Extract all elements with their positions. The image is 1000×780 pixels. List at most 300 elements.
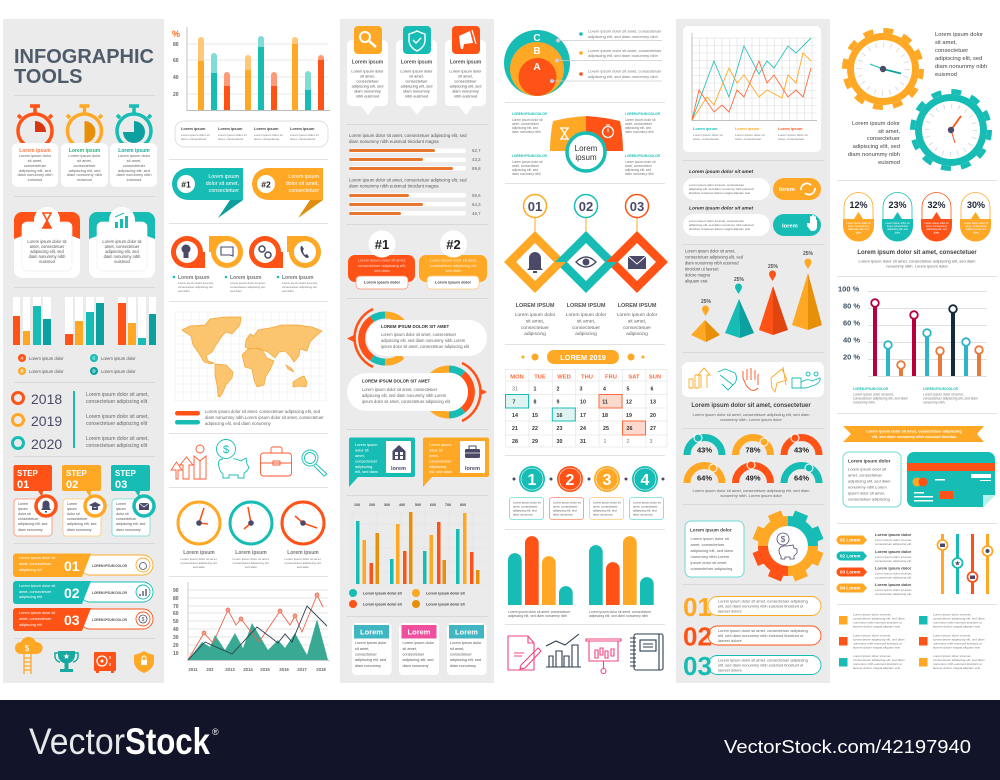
ribbon banner: [843, 426, 984, 442]
numbered circles: [510, 466, 664, 520]
gear text box: consectetuer adipiscing: [690, 566, 732, 571]
header cards: adipiscing elit, sed: [402, 658, 434, 662]
semi gauges: 64%: [697, 474, 712, 482]
tag list: 02 Lorem: [840, 554, 860, 558]
calendar: MON: [510, 374, 524, 380]
speech tag #1: consectetuer: [209, 188, 239, 194]
pin captions: Lorem ipsum dolor sit amet,: [282, 281, 318, 285]
header cards: consectetuer: [355, 652, 377, 656]
big numbered pills: 03: [683, 651, 712, 681]
stopwatch orange: [67, 106, 102, 148]
grouped bar chart: 800: [460, 503, 466, 507]
rounded bar charts: Lorem ipsum dolor sit amet, consectetuer: [508, 610, 571, 614]
center hub diagram: LOREM IPSUM DOLOR: [512, 112, 548, 116]
lollipop chart: nonummy nibh.: [923, 400, 946, 404]
square legend grid: Lorem ipsum dolor sit amet,: [853, 612, 891, 616]
rounded bar charts: Lorem ipsum dolor sit amet, consectetuer: [589, 610, 652, 614]
lollipop chart: 40 %: [843, 336, 860, 344]
mountain line chart: 20: [173, 643, 179, 649]
numbered diamonds: consectetuer: [572, 325, 600, 331]
center hub diagram: LOREM IPSUM DOLOR: [625, 154, 661, 158]
speech box: briefcase: elit, sed diam: [429, 469, 452, 474]
pyramid chart: 25%: [803, 251, 814, 257]
step 02: 02: [66, 479, 78, 491]
step 03: [111, 465, 154, 536]
numbered diamonds: Lorem ipsum dolor: [515, 312, 556, 318]
lollipop chart: 80 %: [843, 302, 860, 310]
row 02: amet, consectetuer: [19, 590, 52, 594]
year timeline: 2020: [31, 436, 62, 452]
clock captions: [180, 550, 322, 569]
card: growth chart: [89, 207, 155, 278]
credit card text box: [843, 452, 901, 507]
grouped bar chart: 300: [384, 503, 390, 507]
header cards: Lorem ipsum dolor: [355, 641, 387, 645]
step 02: Lorem: [67, 502, 77, 506]
nested circles ABC: adipiscing elit, sed diam nonummy nibh: [588, 74, 658, 79]
numbered circles: amet, consectetuer: [553, 504, 578, 508]
percent capsules: 12%: [849, 200, 868, 210]
calendar: 28: [512, 439, 518, 445]
center hub diagram: diam nonummy nibh: [512, 130, 541, 134]
grouped bar chart: 500: [415, 503, 421, 507]
header cards: consectetuer: [402, 652, 425, 656]
square legend grid: Lorem ipsum dolor sit amet,: [853, 654, 891, 658]
ring callout left: LOREM IPSUM DOLOR SIT AMET: [381, 324, 449, 329]
pyramid chart: 25%: [734, 277, 745, 283]
line chart card: amet, consectetuer: [735, 137, 761, 141]
numbered circles: amet, consectetuer: [593, 504, 618, 508]
speech box: house: amet,: [355, 453, 365, 458]
clock red: [282, 502, 324, 544]
clock captions: consectetuer adipiscing elit,: [285, 561, 322, 565]
gear clock teal: [912, 92, 990, 168]
percent capsules: diam: [895, 232, 900, 234]
tag list: consectetuer adipiscing elit,: [875, 576, 912, 580]
big numbered pills: Lorem ipsum dolor sit amet, consectetuer adipiscing: [718, 598, 808, 604]
stopwatch text: sit amet,: [77, 158, 92, 163]
progress bars: 64,3: [472, 202, 481, 207]
gear clock text: diam nonummy nibh: [848, 152, 900, 158]
big numbered pills: elit, sed diam nonummy nibh euismod tincidunt ut: [718, 633, 804, 638]
row 02: [13, 581, 153, 604]
speech box: briefcase: amet,: [429, 453, 439, 458]
numbered circles: diam nonummy: [553, 512, 573, 516]
footer band: Stock: [125, 721, 210, 762]
stopwatch teal: [117, 106, 151, 148]
line chart card: Lorem ipsum dolor sit: [778, 133, 808, 137]
callout text: consectetuer: [454, 78, 477, 84]
gear clock text: sit amet,: [878, 129, 900, 135]
grouped bar chart: 700: [445, 503, 451, 507]
semi gauges: nonummy nibh. Lorem ipsum dolor: [720, 493, 782, 498]
stopwatch text: adipiscing elit, sed: [69, 168, 100, 173]
callout text: Lorem ipsum: [352, 60, 384, 66]
gear clock text: consectetuer: [867, 136, 900, 142]
row 02: LOREM IPSUM DOLOR: [92, 591, 128, 595]
percent capsules: [843, 192, 991, 268]
clock captions: sed diam: [297, 565, 310, 569]
pyramid chart: aliquam erat: [685, 278, 708, 284]
calendar: 25: [603, 426, 609, 432]
square legend grid: nonummy nibh euismod tincidunt ut: [933, 621, 982, 625]
numbered diamonds: consectetuer: [521, 325, 549, 331]
tag #2 orange: #2: [446, 237, 461, 252]
callout: search: [347, 26, 388, 115]
ring callout left: [347, 309, 487, 367]
tag list: 03 Lorem: [840, 570, 860, 574]
stopwatches: [12, 106, 157, 187]
percent capsules: diam: [973, 232, 979, 234]
stopwatch text: consectetuer: [24, 163, 47, 168]
speech tag #2: #2: [261, 180, 271, 190]
callout text: nibh euismod: [405, 94, 428, 98]
progress bars: diam nonummy nibh euismod tincidunt magna: [349, 184, 439, 188]
chart caption box: Lorem ipsum dolor sit: [254, 133, 283, 137]
step 01: adipiscing elit, sed: [18, 522, 47, 526]
square legend grid: consectetuer adipiscing elit, sed diam: [933, 658, 985, 662]
row 03: LOREM IPSUM DOLOR: [92, 618, 128, 622]
lollipop chart: LOREM IPSUM DOLOR: [923, 387, 959, 391]
year timeline: consectetuer adipiscing elit: [86, 421, 148, 427]
center hub diagram: Lorem ipsum dolor sit: [512, 160, 543, 164]
step 02: STEP: [66, 469, 88, 478]
mountain line chart: 80: [173, 596, 179, 602]
line chart card: Lorem ipsum: [778, 126, 803, 131]
header cards: Lorem: [408, 628, 431, 636]
percent capsules: 30%: [967, 200, 985, 210]
tag list: Lorem ipsum dolor: [875, 582, 912, 587]
stopwatch text: euismod: [127, 177, 141, 182]
stopwatch cards: [12, 143, 157, 187]
percent capsules: adipiscing elit, sed: [887, 228, 908, 231]
map legend: adipiscing elit, sed diam nonummy: [205, 421, 272, 426]
rounded bar charts: adipiscing elit, sed diam nonummy nibh: [508, 614, 567, 618]
mountain line chart: 50: [173, 619, 179, 625]
percent bar chart: 80: [173, 42, 179, 48]
row 03: Lorem ipsum dolor sit: [19, 611, 56, 615]
gear clock text: adipiscing elit, sed: [935, 56, 982, 62]
stopwatch text: diam nonummy nibh: [67, 172, 102, 177]
calendar: 19: [626, 413, 632, 419]
header cards: sit amet,: [450, 647, 464, 651]
progress bars: diam nonummy nibh euismod tincidunt magna: [349, 139, 439, 144]
calendar: 1: [604, 439, 607, 445]
numbered diamonds: adipiscing: [626, 331, 648, 337]
ring callout right: LOREM IPSUM DOLOR SIT AMET: [362, 378, 430, 384]
speech tag #1: Lorem ipsum: [208, 174, 240, 180]
grouped bar chart: [347, 503, 486, 608]
tag #1 red: #1: [375, 237, 389, 252]
tag list: consectetuer adipiscing elit,: [875, 542, 912, 546]
square legend grid: consectetuer adipiscing elit, sed diam: [853, 638, 905, 642]
lollipop chart: LOREM IPSUM DOLOR: [853, 387, 889, 391]
speech box: house: consectetuer: [355, 458, 378, 464]
location pins: [171, 236, 321, 293]
stopwatch red: [18, 106, 52, 148]
gear clock text: consectetuer: [935, 48, 968, 54]
callout text: sit amet,: [360, 74, 375, 78]
gesture icons card: nonummy nibh. Lorem ipsum dolor: [720, 417, 782, 422]
stopwatch text: Lorem ipsum: [118, 148, 150, 154]
square legend grid: laoreet dolore magna aliquam erat: [933, 646, 980, 650]
tag list: Lorem ipsum dolor: [875, 566, 912, 570]
icon: notebook: [630, 634, 663, 670]
row 01: [13, 554, 153, 577]
button rows: Lorem ipsum dolor sit amet: [689, 206, 754, 212]
clock captions: consectetuer adipiscing elit,: [181, 561, 218, 565]
chart caption box: amet, consectetuer: [290, 137, 316, 141]
percent bar chart: 20: [173, 92, 179, 98]
icon: piggy bank: [216, 440, 249, 478]
calendar: 11: [602, 400, 608, 406]
numbered circles: adipiscing elit, sed: [553, 508, 577, 512]
numbered circles: Lorem ipsum dolor sit: [513, 500, 541, 504]
speech box: briefcase: lorem: [465, 466, 480, 472]
title: [14, 46, 154, 88]
nested circles ABC: Lorem ipsum dolor sit amet, consectetuer: [588, 28, 662, 34]
mountain line chart: 30: [173, 635, 179, 641]
numbered diamonds: LOREM IPSUM: [618, 303, 657, 309]
progress bars: 89,8: [472, 166, 481, 171]
big numbered pills: 01: [683, 592, 712, 622]
square legend grid: nonummy nibh euismod tincidunt ut: [933, 662, 982, 666]
step 02: ipsum: [67, 507, 77, 511]
speech box: house: lorem: [391, 466, 406, 472]
world map: [175, 312, 326, 401]
credit card text box: nonummy nibh.Lorem: [848, 484, 887, 490]
percent bar chart: [172, 27, 330, 110]
gear clocks: [844, 30, 990, 168]
chart caption box: Lorem ipsum dolor sit: [181, 133, 210, 137]
stopwatch text: Lorem ipsum dolor: [68, 153, 101, 158]
gear clock text: diam nonummy nibh: [935, 64, 987, 70]
speech tag #2: consectetuer: [289, 188, 319, 194]
map legend: [175, 409, 324, 426]
card: hourglass: [14, 207, 80, 278]
two badge cards: [14, 207, 155, 278]
credit card text box: amet, consectetuer: [848, 472, 883, 478]
gear text box: ipsum dolor sit amet,: [690, 560, 727, 565]
numbered diamonds: 03: [630, 199, 644, 214]
tag #2 orange: Lorem ipsum dolor sit amet,: [429, 258, 478, 262]
percent capsules: Lorem ipsum dolor sit amet, consectetuer adipiscing elit, sed diam: [859, 258, 976, 264]
center hub diagram: ipsum: [575, 153, 597, 162]
card: hourglass: adipiscing elit, sed: [30, 249, 64, 254]
numbered rows: [13, 554, 153, 631]
numbered diamonds: LOREM IPSUM: [516, 303, 555, 309]
calendar: 16: [557, 413, 562, 419]
percent capsules: diam: [934, 232, 939, 234]
center hub diagram: diam nonummy nibh: [512, 172, 541, 176]
speech box: briefcase: adipiscing: [429, 464, 446, 469]
numbered diamonds: Lorem ipsum dolor: [566, 312, 607, 318]
icon: trophy: ★: [63, 652, 70, 661]
percent capsules: 32%: [927, 200, 946, 210]
calendar: THU: [581, 374, 593, 380]
credit card text box: consectetuer adipiscing: [848, 496, 890, 502]
tag #2 orange: sed diam: [446, 268, 461, 273]
gear text box: nonummy nibh.Lorem: [690, 554, 730, 559]
center hub diagram: amet, consectetuer: [625, 122, 653, 126]
mountain line chart: 70: [173, 604, 179, 610]
icon: document pen: [508, 636, 541, 670]
calendar: 27: [650, 426, 656, 432]
gear clock text: Lorem ipsum dolor: [852, 121, 900, 127]
numbered circles: diam nonummy: [593, 512, 613, 516]
progress bars: 59,5: [472, 193, 481, 198]
tag #1 red: Lorem ipsum dolor sit amet,: [358, 258, 406, 262]
step 03: ipsum: [116, 507, 126, 511]
pyramid chart: diam nonummy nibh euismod: [685, 260, 739, 266]
steps: [14, 465, 154, 536]
pyramid chart: 25%: [768, 264, 779, 270]
clock captions: sed diam: [193, 565, 206, 569]
calendar: 7: [513, 400, 516, 406]
pyramid chart: consectetuer adipiscing elit, sed: [685, 254, 744, 260]
header cards: Lorem: [455, 628, 478, 636]
square legend grid: laoreet dolore magna aliquam erat: [933, 666, 980, 670]
calendar: 15: [532, 413, 538, 419]
callout text: diam nonummy: [403, 88, 430, 94]
percent capsules: adipiscing elit, sed: [966, 228, 987, 231]
pyramid chart: dolore magna: [685, 272, 711, 278]
year timeline: 2018: [31, 391, 62, 407]
pin captions: Lorem ipsum: [178, 275, 210, 281]
square legend grid: Lorem ipsum dolor sit amet,: [933, 634, 971, 638]
pin captions: consectetuer adipiscing elit,: [282, 285, 318, 289]
center hub diagram: LOREM IPSUM DOLOR: [625, 112, 661, 116]
step 03: dolor sit: [116, 512, 129, 516]
button rows: adipiscing elit, sed diam nonummy nibh euismod: [689, 187, 754, 191]
mountain line chart: 202: [206, 667, 214, 672]
tag #2 orange: Lorem ipsum dolor: [435, 280, 472, 284]
semi gauges: 43%: [794, 446, 809, 454]
percent capsules: Lorem ipsum dolor sit amet, consectetuer: [857, 250, 977, 256]
percent capsules: Lorem ipsum dolor sit: [964, 222, 988, 225]
calendar: 31: [512, 386, 518, 392]
clock captions: Lorem ipsum: [235, 550, 267, 556]
tag list: Lorem ipsum dolor sit amet,: [875, 538, 912, 542]
speech box: briefcase: [423, 438, 489, 487]
tag #1 red: [348, 230, 415, 289]
gear with piggy bank: [753, 511, 823, 581]
square legend grid: laoreet dolore magna aliquam erat: [853, 666, 900, 670]
semi gauges: 49%: [745, 474, 761, 482]
header cards: diam nonummy: [402, 664, 429, 668]
nested circles ABC: A: [533, 62, 541, 73]
button rows: adipiscing elit, sed diam nonummy nibh euismod: [689, 223, 754, 227]
chart caption box: Lorem ipsum dolor sit: [218, 133, 247, 137]
lollipop chart: Lorem ipsum dolor sit amet,: [923, 392, 964, 396]
center hub diagram: LOREM IPSUM DOLOR: [512, 154, 548, 158]
step 01: diam nonummy: [18, 528, 43, 532]
icon: piggy bank: $: [223, 444, 229, 456]
step 03: diam nonummy: [116, 528, 141, 532]
center hub diagram: diam nonummy nibh: [625, 172, 654, 176]
rounded bar charts: adipiscing elit, sed diam nonummy nibh: [589, 614, 648, 618]
pin captions: consectetuer adipiscing elit,: [230, 285, 266, 289]
icon: cloud ladder: $: [25, 644, 30, 653]
big numbered pills: elit, sed diam nonummy nibh euismod tincidunt ut: [718, 604, 804, 608]
line chart card: Lorem ipsum dolor sit: [693, 133, 723, 137]
credit card text box: Lorem ipsum dolor sit: [848, 466, 887, 472]
step 03: adipiscing elit, sed: [116, 522, 145, 526]
chart caption box: amet, consectetuer: [254, 137, 280, 141]
gear clock text: sit amet,: [935, 40, 957, 46]
icon: arrows and person: [171, 445, 206, 479]
calendar: 31: [580, 439, 586, 445]
calendar: 14: [512, 413, 518, 419]
big numbered pills: laoreet dolore: [718, 668, 742, 672]
nested circles ABC: adipiscing elit, sed diam nonummy nibh: [588, 53, 658, 58]
clock captions: Lorem ipsum dolor sit amet,: [232, 557, 270, 561]
stopwatch text: sit amet,: [28, 158, 42, 163]
percent bar chart: %: [172, 29, 180, 39]
lollipop chart: [838, 284, 987, 404]
row 01: Lorem ipsum dolor sit: [19, 556, 56, 560]
calendar: SAT: [628, 374, 640, 380]
center hub diagram: adipiscing elit, sed: [625, 168, 651, 172]
gear clock text: [848, 32, 987, 166]
percent capsules: Lorem ipsum dolor sit: [925, 222, 949, 225]
step 03: 03: [115, 479, 127, 491]
calendar: 17: [580, 413, 586, 419]
step 02: [62, 465, 105, 536]
nested circles ABC: adipiscing elit, sed diam nonummy nibh: [588, 34, 658, 39]
bar chart legend: Lorem ipsum dolor: [101, 356, 136, 361]
icon: chart growth: [546, 634, 581, 667]
pin captions: [173, 275, 318, 293]
pin captions: consectetuer adipiscing elit,: [178, 285, 214, 289]
stopwatch text: sit amet,: [127, 158, 141, 163]
calendar: 4: [603, 386, 606, 392]
center hub diagram: Lorem ipsum dolor sit: [625, 160, 656, 164]
map legend: Lorem ipsum dolor sit amet, consectetuer adipiscing elit, sed: [205, 409, 321, 414]
year timeline: Lorem ipsum dolor sit amet,: [86, 436, 149, 442]
button rows: Lorem ipsum dolor sit amet, consectetuer: [689, 219, 744, 223]
row 02: Lorem ipsum dolor sit: [19, 584, 56, 588]
line chart card: amet, consectetuer: [778, 137, 804, 141]
tag #1 red: Lorem ipsum dolor: [364, 280, 401, 284]
square legend grid: laoreet dolore magna aliquam erat: [853, 646, 900, 650]
semi gauges: 43%: [697, 446, 712, 454]
calendar: 10: [580, 400, 586, 406]
ring callout right: adipiscing elit, sed diam nonummy nibh.Lorem: [362, 393, 447, 398]
nested circles ABC: C: [533, 33, 541, 44]
percent capsules: Lorem ipsum dolor sit: [886, 222, 910, 225]
slider controls: ★: [954, 560, 961, 568]
step 01: dolor sit: [18, 512, 31, 516]
map legend: diam nonummy nibh.Lorem ipsum dolor sit amet, consectetuer: [205, 415, 324, 420]
numbered diamonds: sit amet,: [628, 318, 646, 324]
gear text box: adipiscing elit, sed diam: [690, 548, 734, 553]
step 03: Lorem: [116, 502, 126, 506]
pin captions: Lorem ipsum dolor sit amet,: [178, 281, 214, 285]
square legend grid: nonummy nibh euismod tincidunt ut: [853, 642, 902, 646]
bar chart legend: Lorem ipsum dolor: [29, 369, 64, 374]
gear text box: amet, consectetuer: [690, 542, 725, 547]
step 03: consectetuer: [116, 517, 137, 521]
calendar: 3: [650, 439, 653, 445]
center hub diagram: Lorem ipsum dolor sit: [625, 118, 656, 122]
pyramid chart: [685, 248, 822, 342]
semi gauges: 78%: [745, 446, 761, 454]
step 01: Lorem: [18, 502, 28, 506]
tag #1 red: consectetuer adipiscing elit,: [358, 263, 406, 268]
footer band: ®: [212, 727, 219, 737]
bar chart legend: D: [92, 369, 96, 374]
